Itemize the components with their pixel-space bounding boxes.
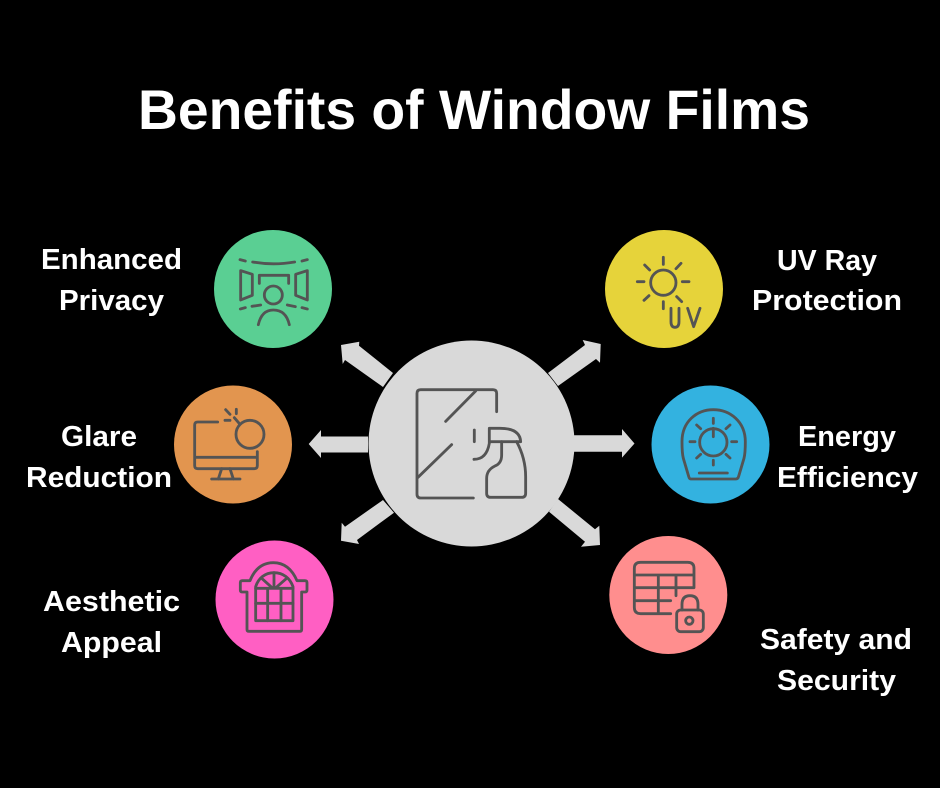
- icon: thermostat dial: [682, 410, 745, 479]
- icon: window and spray bottle: [417, 390, 526, 498]
- benefit: Glare Reduction: [26, 386, 292, 504]
- label: Efficiency: [777, 462, 918, 494]
- label: Safety and: [760, 624, 912, 656]
- label: Aesthetic: [43, 586, 180, 618]
- label: [43, 586, 180, 659]
- label: Glare: [61, 421, 137, 453]
- icon: monitor with sun: [195, 409, 264, 479]
- benefit: Enhanced Privacy: [41, 230, 332, 348]
- icon: arched window: [240, 563, 307, 631]
- label: Privacy: [59, 285, 164, 317]
- label: UV Ray: [777, 245, 877, 277]
- icon: sun and UV: [637, 257, 700, 327]
- benefit: Energy Efficiency: [652, 386, 918, 504]
- benefit: UV Ray Protection: [605, 230, 902, 348]
- benefit: Safety and Security: [609, 536, 912, 697]
- icon: table with padlock: [634, 562, 703, 632]
- label: [26, 421, 172, 494]
- label: [752, 245, 902, 317]
- label: Reduction: [26, 462, 172, 494]
- title: Benefits of Window Films: [138, 78, 810, 141]
- label: Appeal: [61, 627, 162, 659]
- label: Security: [777, 665, 896, 697]
- icon: privacy: [240, 260, 307, 325]
- label: Energy: [798, 421, 896, 453]
- benefit: Aesthetic Appeal: [43, 540, 334, 659]
- arrows radiating from the hub: [309, 340, 634, 547]
- label: Protection: [752, 285, 902, 317]
- label: [41, 244, 182, 317]
- label: [777, 421, 918, 494]
- label: [760, 624, 912, 697]
- central hub: [368, 340, 574, 546]
- label: Enhanced: [41, 244, 182, 276]
